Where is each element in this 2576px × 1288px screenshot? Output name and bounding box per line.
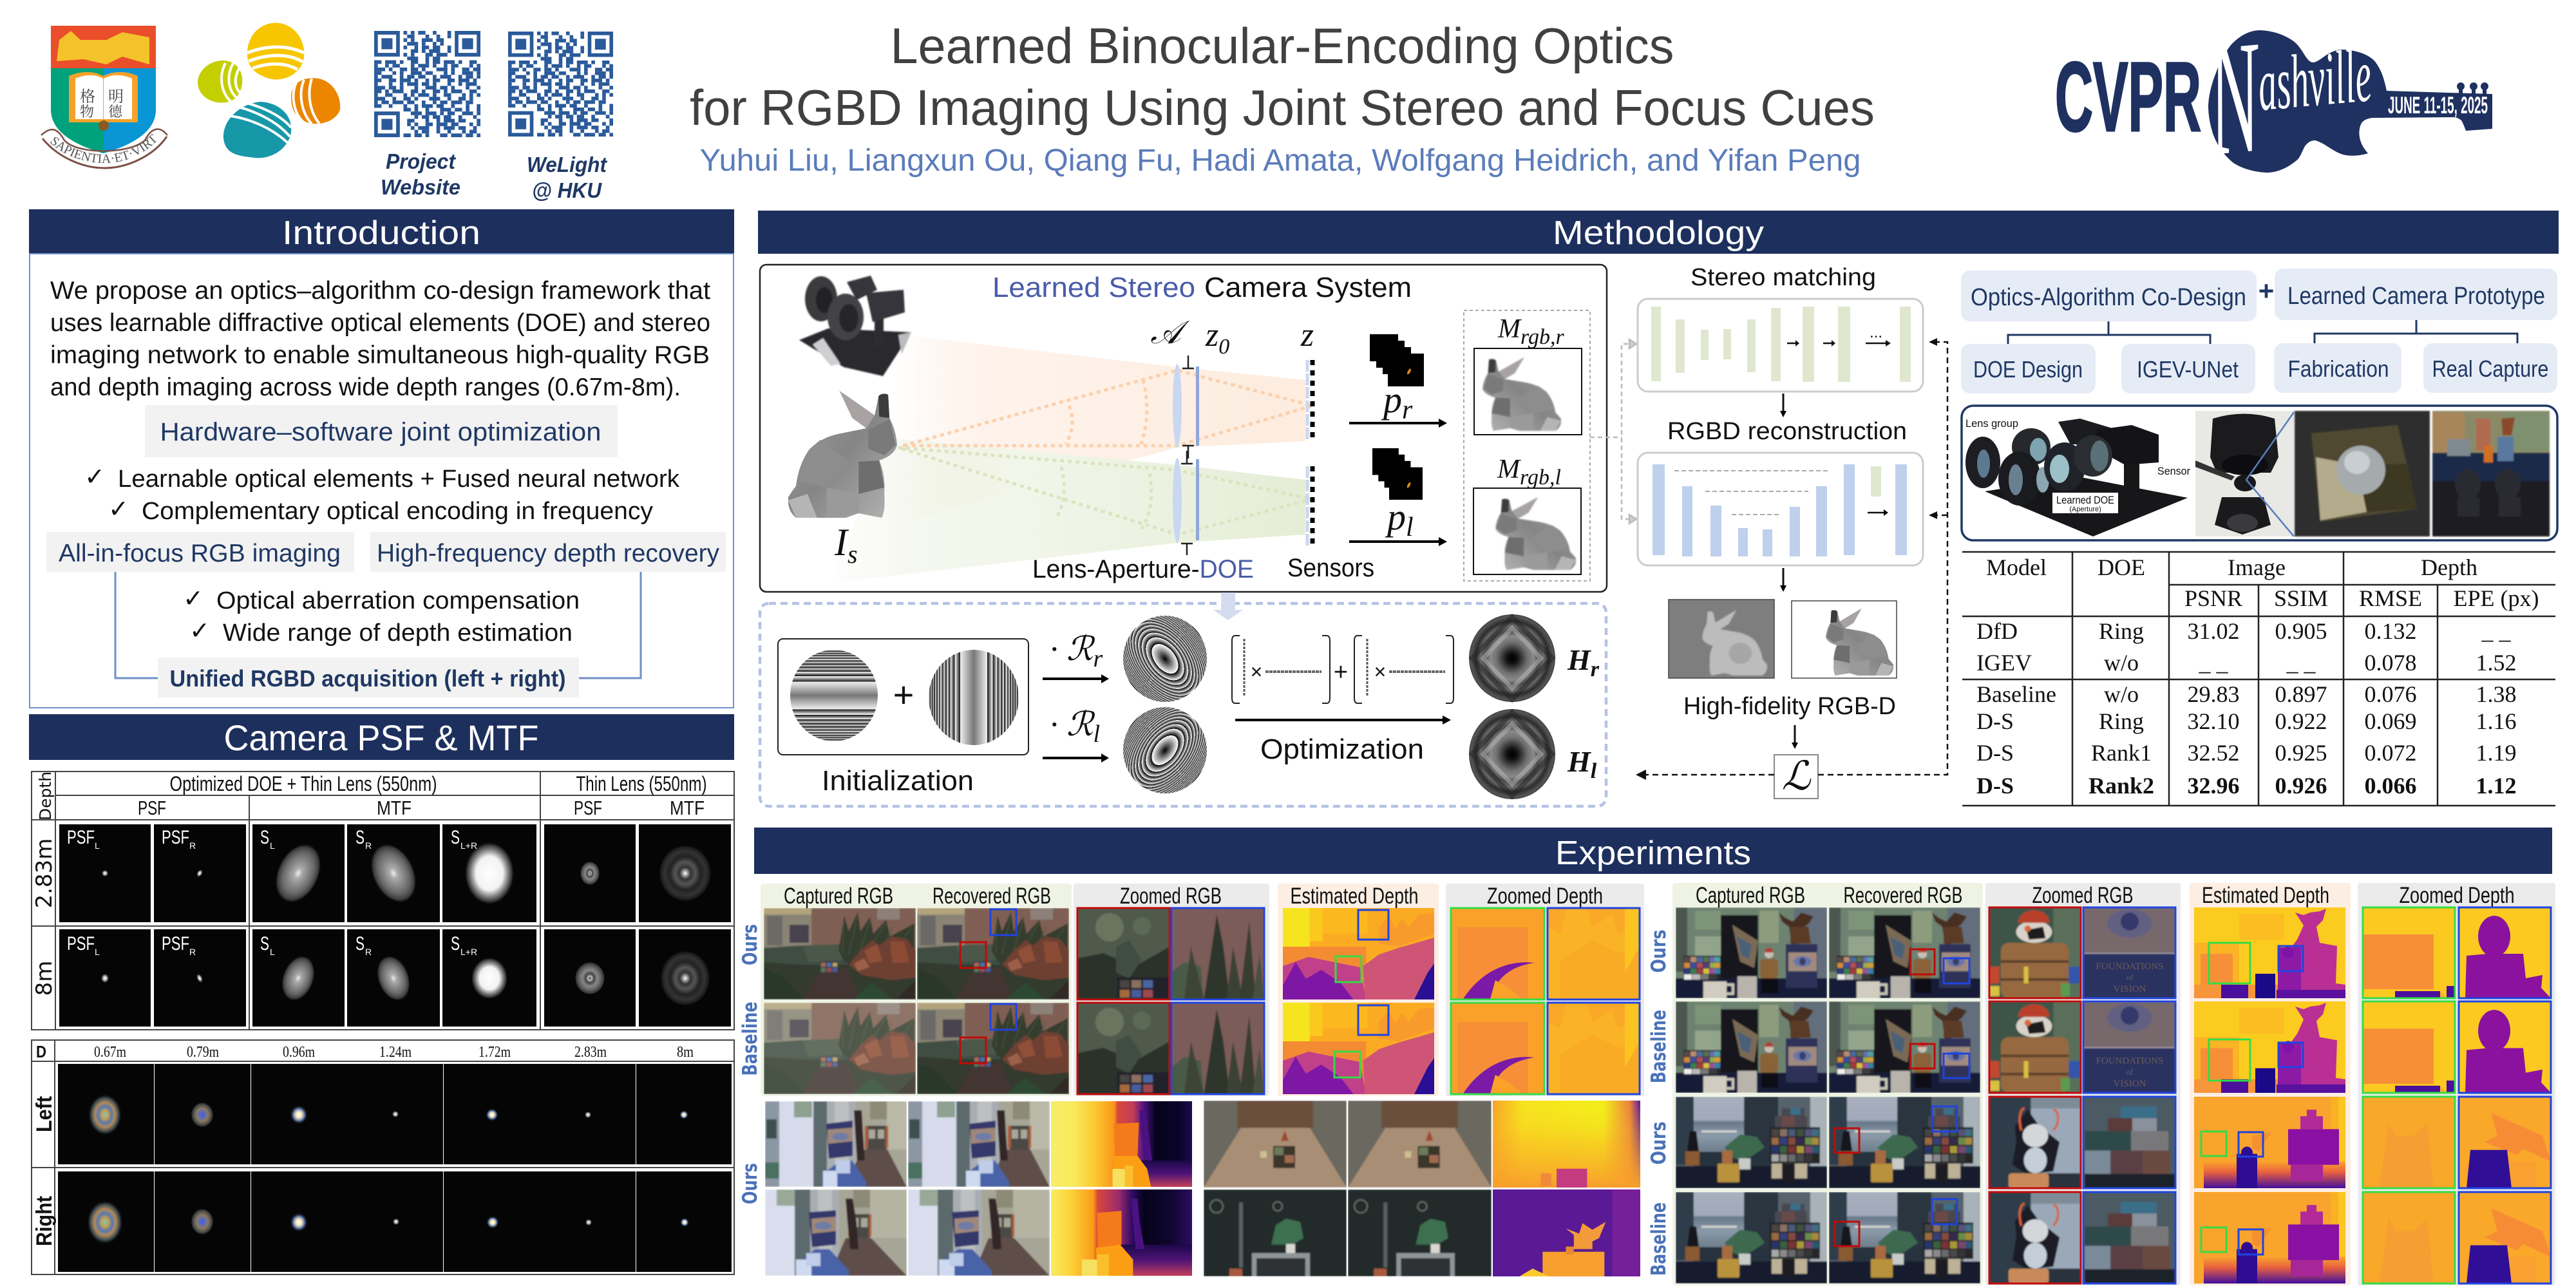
title (690, 17, 1875, 136)
box: DOE design: DOE Design (1973, 356, 2083, 383)
table: PSF and MTF per depth: L+R (460, 947, 477, 957)
table: PSF and MTF per depth: L (95, 840, 100, 851)
label: initialization: Initialization (822, 765, 974, 797)
labels: H_r H_l: r (1591, 658, 1600, 681)
prototype photos panel (1962, 406, 2557, 540)
logo: CVPR Nashville guitar: N (2199, 7, 2271, 190)
render: lens group: (Aperture) (2069, 506, 2101, 513)
rotated phase patterns (1123, 616, 1207, 793)
intro paragraph (50, 277, 710, 401)
labels: side rows left: Ours (739, 1163, 762, 1204)
table: quantitative results: _ _ (2481, 618, 2512, 644)
table: PSF and MTF per depth: S (451, 827, 460, 848)
table: quantitative results: 1.38 (2476, 681, 2517, 707)
formula labels: 0 (1218, 335, 1229, 359)
box: DOE design (1961, 344, 2096, 393)
figure: toy and shelf comparison: Captured RGB (1696, 883, 1805, 908)
low-rank matrices: × (1374, 660, 1386, 683)
formula labels: l (1406, 513, 1414, 542)
labels: H_r H_l: H (1567, 643, 1591, 676)
figure: plants comparison: Estimated Depth (1291, 884, 1418, 909)
checklist 1: Complementary optical encoding in frequency (142, 498, 653, 525)
table: PSF and MTF per depth (32, 772, 734, 1030)
logo: CVPR Nashville guitar: CVPR (2055, 42, 2201, 152)
table: quantitative results (1962, 552, 2555, 806)
labels: H_r H_l: l (1591, 759, 1597, 783)
table: quantitative results: 0.072 (2365, 740, 2416, 766)
table: quantitative results: 0.078 (2365, 650, 2416, 676)
label: project website: Project (386, 149, 457, 173)
table: quantitative results: 0.066 (2365, 773, 2416, 799)
arrow: to RGB-D output (1780, 568, 1786, 592)
table: colour PSF at seven depths: D (36, 1042, 46, 1061)
table: quantitative results: EPE (px) (2454, 585, 2539, 611)
labels: side rows right: Baseline (1647, 1010, 1671, 1083)
formula labels: p (1387, 496, 1406, 538)
icon: apertures (1181, 355, 1194, 555)
table: quantitative results: 1.52 (2476, 650, 2517, 676)
table: quantitative results: 1.12 (2476, 773, 2517, 799)
table: PSF and MTF per depth: MTF (670, 797, 705, 819)
label: optimization: Optimization (1260, 734, 1424, 765)
figure: locker and plant scenes (1204, 1101, 1640, 1276)
table: PSF and MTF per depth: PSF (67, 933, 95, 954)
table: quantitative results: Ring (2099, 618, 2144, 644)
table: PSF and MTF per depth: S (260, 827, 269, 848)
table: colour PSF at seven depths: 2.83m (574, 1044, 607, 1061)
formula labels: p (1383, 379, 1402, 421)
table: quantitative results: 0.905 (2275, 618, 2327, 644)
label: sensors: Sensors (1287, 554, 1374, 582)
labels: side rows right: Ours (1647, 1122, 1671, 1164)
low-rank matrices (1232, 636, 1454, 703)
arrows: PSF to measurement (1349, 419, 1447, 546)
measurements box (1464, 310, 1590, 581)
checklist 2 (183, 584, 580, 647)
table: colour PSF at seven depths: 0.79m (187, 1044, 219, 1061)
table: quantitative results: Ring (2099, 708, 2144, 734)
checklist 2: Optical aberration compensation (216, 587, 580, 614)
table: quantitative results: 0.132 (2365, 618, 2416, 644)
table: colour PSF at seven depths: Left (32, 1096, 57, 1132)
initialization box: + (893, 674, 914, 715)
heading: experiments: Experiments (1555, 835, 1751, 872)
box: optics-algorithm co-design: Optics-Algorithm Co-Design (1971, 284, 2246, 311)
callout: all-in-focus RGB: All-in-focus RGB imaging (59, 540, 341, 567)
table: PSF and MTF per depth: Depth (36, 772, 55, 820)
logo: HKU crest (41, 26, 168, 169)
intro paragraph: and depth imaging across wide depth ranges (0.67m-8m). (50, 374, 681, 401)
rotation operators: · ℛ (1050, 631, 1094, 668)
render: lens group: Lens group (1965, 417, 2018, 430)
authors: Yuhui Liu, Liangxun Ou, Qiang Fu, Hadi Amata, Wolfgang Heidrich, and Yifan Peng (699, 144, 1861, 178)
formula labels: z (1206, 317, 1218, 354)
table: quantitative results: 31.02 (2187, 618, 2240, 644)
logo: HKU crest: 德 (108, 101, 123, 121)
box: IGEV-UNet (2121, 344, 2255, 393)
table: quantitative results: w/o (2104, 681, 2139, 707)
labels: side rows left: Ours (739, 924, 762, 965)
diagram: beams and rays (831, 335, 1312, 583)
QR code: WeLight at HKU (508, 32, 613, 202)
table: quantitative results: 29.83 (2187, 681, 2240, 707)
table: quantitative results: 0.069 (2365, 708, 2416, 734)
labels: side rows right: Ours (1647, 930, 1671, 972)
formula labels: rgb,r (1520, 325, 1564, 349)
table: colour PSF at seven depths: 0.67m (94, 1044, 126, 1061)
photo: stereo camera rig (799, 276, 911, 376)
table: quantitative results: 32.96 (2187, 773, 2240, 799)
heading: methodology: Methodology (1553, 214, 1764, 252)
intro paragraph: imaging network to enable simultaneous high-quality RGB (50, 341, 710, 369)
table: quantitative results: D-S (1976, 740, 2014, 766)
PSF stacks (1370, 334, 1424, 500)
figure: plants comparison: Zoomed RGB (1120, 884, 1222, 909)
table: quantitative results: w/o (2104, 650, 2139, 676)
callout: all-in-focus RGB (46, 532, 354, 572)
table: colour PSF at seven depths (32, 1040, 734, 1274)
arrow: optimization (1235, 715, 1451, 724)
formula labels: M (1498, 314, 1520, 344)
figure: toy and shelf comparison: Zoomed RGB (2032, 883, 2133, 908)
box: fabrication: Fabrication (2287, 355, 2389, 382)
render: lens group (1965, 417, 2190, 536)
figure: plants comparison: Captured RGB (784, 884, 893, 909)
table: PSF and MTF per depth: R (365, 840, 372, 851)
callout: hardware-software (145, 405, 618, 457)
table: PSF and MTF per depth: PSF (162, 827, 189, 848)
table: quantitative results: IGEV (1976, 650, 2032, 676)
panel: DOE initialization and optimization (760, 592, 1606, 806)
intro paragraph: We propose an optics–algorithm co-design framework that (50, 277, 710, 305)
checklist 1 (84, 462, 680, 525)
figure: toy and shelf comparison (1672, 883, 2555, 1285)
table: quantitative results: 0.897 (2275, 681, 2327, 707)
formula labels: z (1300, 317, 1314, 354)
rotation operators: · ℛ (1050, 706, 1094, 743)
co-design boxes (1961, 269, 2557, 393)
optimized height maps (1469, 614, 1555, 799)
table: quantitative results: 32.10 (2187, 708, 2240, 734)
logo: KAUST petals (198, 23, 340, 158)
heading: introduction (29, 209, 734, 254)
table: quantitative results: Model (1986, 554, 2047, 580)
table: PSF and MTF per depth: 2.83m (32, 838, 57, 908)
callout: high-frequency depth: High-frequency depth recovery (377, 540, 719, 567)
panel: learned stereo camera system (760, 265, 1607, 592)
box: real capture (2423, 343, 2557, 393)
photo: lens and DOE (2195, 411, 2294, 536)
table: quantitative results: Image (2228, 554, 2286, 580)
QR code: project website: Website (381, 175, 460, 199)
figure: plants comparison: Recovered RGB (933, 884, 1051, 909)
table: PSF and MTF per depth: PSF (574, 797, 602, 819)
table: PSF and MTF per depth: Optimized DOE + Thin Lens (550nm) (170, 772, 437, 795)
table: PSF and MTF per depth: S (355, 933, 365, 954)
heading: experiments (754, 828, 2552, 874)
box: learned camera prototype (2275, 269, 2557, 320)
table: PSF and MTF per depth: MTF (377, 797, 412, 819)
network: stereo matching (1638, 299, 1923, 392)
icon: lenses (1173, 364, 1182, 543)
table: PSF and MTF per depth: PSF (67, 827, 95, 848)
labels: side rows left: Baseline (739, 1002, 762, 1075)
heading: methodology (758, 211, 2559, 254)
label: RGBD reconstruction: RGBD reconstruction (1667, 418, 1907, 445)
table: quantitative results: SSIM (2274, 585, 2328, 611)
QR code: project website (374, 31, 480, 199)
table: quantitative results: Rank1 (2091, 740, 2152, 766)
formula labels: M (1497, 455, 1520, 484)
QR code: WeLight at HKU: @ HKU (532, 178, 602, 202)
labels: side rows right (1647, 930, 1671, 1276)
table: quantitative results: DfD (1976, 618, 2018, 644)
callout: unified RGBD: Unified RGBD acquisition (left + right) (170, 665, 565, 692)
table: quantitative results: _ _ (2286, 650, 2316, 676)
labels: H_r H_l (1567, 643, 1600, 783)
rotation operators: r (1094, 645, 1103, 672)
labels: H_r H_l: H (1567, 745, 1591, 778)
panel: experiments (739, 828, 2555, 1285)
figure: plants comparison: Zoomed Depth (1487, 884, 1603, 909)
table: colour PSF at seven depths: Right (32, 1196, 57, 1246)
table: quantitative results: Rank2 (2088, 773, 2154, 799)
checklist 2: Wide range of depth estimation (223, 620, 573, 647)
connector: dashed grey feed to network (1590, 339, 1636, 524)
rotation operators (1043, 631, 1109, 762)
formula labels: rgb,l (1520, 466, 1561, 489)
table: quantitative results: Baseline (1976, 681, 2056, 707)
table: quantitative results: 0.926 (2275, 773, 2327, 799)
loss box: ℒ (1782, 755, 1812, 799)
table: quantitative results: 1.19 (2476, 740, 2517, 766)
icon: sensors (1307, 360, 1312, 546)
table: PSF and MTF per depth: S (451, 933, 460, 954)
table: colour PSF at seven depths: 1.72m (478, 1044, 511, 1061)
network: RGBD reconstruction (1638, 453, 1923, 565)
table: PSF and MTF per depth: L+R (460, 840, 477, 851)
table: PSF and MTF per depth: S (260, 933, 269, 954)
table: quantitative results: RMSE (2359, 585, 2422, 611)
table: PSF and MTF per depth: R (189, 840, 196, 851)
formula labels: r (1402, 395, 1413, 425)
table: PSF and MTF per depth: L (270, 947, 275, 957)
icon: bunny scene (788, 391, 897, 518)
panel title: Learned Stereo (992, 272, 1195, 303)
table: PSF and MTF per depth: R (189, 947, 196, 957)
labels: side rows left (739, 924, 762, 1204)
callout: unified RGBD (158, 658, 579, 697)
checklist 2: ✓ (183, 584, 204, 612)
title: for RGBD Imaging Using Joint Stereo and Focus Cues (690, 79, 1875, 136)
table: quantitative results: 0.925 (2275, 740, 2327, 766)
render: lens group: Learned DOE (2056, 494, 2114, 506)
labels: side rows right: Baseline (1647, 1202, 1671, 1276)
box: IGEV-UNet: IGEV-UNet (2137, 356, 2239, 383)
panel: learned stereo camera system: Camera System (1204, 272, 1412, 303)
heading: camera PSF and MTF (29, 714, 734, 760)
checklist 1: ✓ (108, 495, 129, 523)
block arrow from camera to DOE (1213, 592, 1243, 620)
loss box (1774, 755, 1818, 799)
rotation operators: l (1094, 721, 1100, 748)
arrow: to RGBD (1780, 393, 1786, 417)
figure: toy and shelf comparison: Estimated Depth (2202, 883, 2329, 908)
table: PSF and MTF per depth: Thin Lens (550nm) (576, 772, 707, 795)
panel: methodology (758, 211, 2559, 806)
panel: introduction (29, 209, 734, 708)
formula labels: s (848, 540, 858, 569)
table: PSF and MTF per depth: L (95, 947, 100, 957)
table: colour PSF at seven depths: 0.96m (283, 1044, 315, 1061)
box: learned camera prototype: Learned Camera Prototype (2287, 283, 2545, 310)
box: fabrication (2274, 343, 2401, 393)
table: PSF and MTF per depth: R (365, 947, 372, 957)
checklist 1: ✓ (84, 462, 105, 491)
photo: stereo capture setup (2432, 411, 2550, 536)
figure: plants comparison (761, 884, 1644, 1096)
label: high-fidelity RGB-D: High-fidelity RGB-D (1683, 693, 1896, 720)
table: quantitative results: D-S (1976, 773, 2014, 799)
figure: corridor scenes (765, 1101, 1192, 1276)
icon: DOE bars (1196, 366, 1199, 540)
arrow: to loss (1792, 725, 1798, 749)
table: colour PSF at seven depths: 1.24m (379, 1044, 412, 1061)
table: PSF and MTF per depth: L (270, 840, 275, 851)
table: quantitative results: DOE (2098, 554, 2145, 580)
panel: camera PSF and MTF (29, 714, 734, 1274)
callout: high-frequency depth (370, 532, 726, 572)
box: real capture: Real Capture (2432, 355, 2549, 382)
table: quantitative results: 32.52 (2187, 740, 2240, 766)
table: quantitative results: 0.922 (2275, 708, 2327, 734)
table: quantitative results: D-S (1976, 708, 2014, 734)
low-rank matrices: + (1334, 659, 1348, 686)
initialization box (778, 639, 1028, 755)
table: PSF and MTF per depth: PSF (138, 797, 166, 819)
table: quantitative results: Depth (2421, 554, 2477, 580)
callout: hardware-software: Hardware–software joint optimization (160, 418, 601, 446)
render: lens group: Sensor (2157, 465, 2190, 477)
label: lens aperture DOE: Lens-Aperture-DOE (1032, 555, 1254, 583)
figure: toy and shelf comparison: Recovered RGB (1843, 883, 1963, 908)
formula labels: 𝒜 (1150, 314, 1189, 350)
table: PSF and MTF per depth: S (355, 827, 365, 848)
checklist 2: ✓ (189, 616, 210, 645)
checklist 1: Learnable optical elements + Fused neural network (118, 466, 680, 493)
label: stereo matching: Stereo matching (1690, 264, 1876, 291)
table: colour PSF at seven depths: 8m (677, 1044, 694, 1061)
table: PSF and MTF per depth: PSF (162, 933, 189, 954)
logo: HKU crest: 明 (108, 84, 124, 106)
heading: introduction: Introduction (282, 214, 480, 252)
label: WeLight at HKU: WeLight (527, 153, 608, 176)
formula labels: I (835, 521, 848, 564)
low-rank matrices: × (1251, 660, 1262, 683)
logo: CVPR Nashville guitar: ashville (2255, 33, 2374, 127)
figure: toy and shelf comparison: Zoomed Depth (2400, 883, 2514, 908)
intro paragraph: uses learnable diffractive optical elements (DOE) and stereo (50, 309, 710, 337)
formula labels (834, 314, 1564, 569)
logo: HKU crest: 格 (80, 84, 95, 106)
table: quantitative results: 1.16 (2476, 708, 2517, 734)
title: Learned Binocular-Encoding Optics (890, 17, 1674, 74)
table: PSF and MTF per depth: 8m (32, 961, 57, 996)
logo: HKU crest: 物 (80, 101, 94, 121)
table: quantitative results: 0.076 (2365, 681, 2416, 707)
feedback arrows (1636, 338, 1947, 780)
co-design boxes: + (2259, 276, 2274, 306)
box: optics-algorithm co-design (1961, 270, 2257, 321)
photo: fabricated DOE (2295, 411, 2430, 536)
table: quantitative results: PSNR (2184, 585, 2242, 611)
logo: CVPR Nashville guitar (2055, 0, 2492, 190)
heading: camera PSF and MTF: Camera PSF & MTF (224, 717, 538, 758)
table: quantitative results: _ _ (2199, 650, 2228, 676)
output images (1669, 600, 1897, 678)
network: stereo matching: ... (1870, 324, 1882, 341)
